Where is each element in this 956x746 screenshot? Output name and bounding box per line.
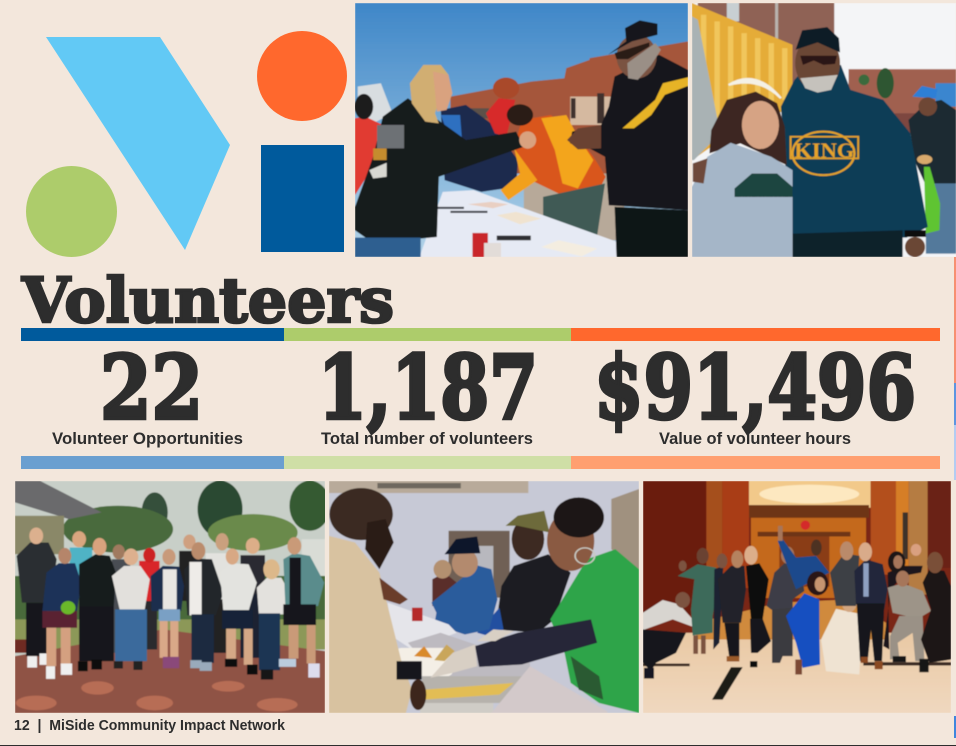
photo: two volunteers posing: EASTERN MARKET: [736, 189, 792, 199]
footer: page number and organisation: 12 | MiSide Community Impact Network: [14, 718, 286, 734]
photo: two volunteers posing: [692, 3, 956, 257]
dark suit and beard: [830, 553, 859, 606]
back row: [70, 548, 92, 598]
photo: volunteers at sign-in table: [355, 3, 688, 257]
photo: outdoor volunteer group: [15, 481, 325, 713]
dark coat pair: [713, 566, 723, 649]
logo: orange circle: [257, 31, 347, 121]
right edge colour strips: [954, 257, 956, 738]
black dress right: [921, 569, 951, 663]
grey suit crouching: [888, 583, 931, 616]
bottom edge line: [0, 745, 956, 746]
front row: [17, 527, 324, 680]
logo: blue chevron: [46, 37, 230, 250]
blue dress: [786, 593, 820, 668]
stat value: 22: 22: [100, 336, 203, 440]
stat: total volunteers: [318, 336, 538, 448]
stat label: total volunteers: Total number of volunteers: [321, 430, 533, 448]
white dress seated: [821, 609, 862, 675]
photo: volunteers serving food: [329, 481, 639, 713]
stat: value of hours: [594, 336, 916, 448]
top colour bar: [21, 328, 940, 341]
heading: Volunteers: Volunteers: [21, 264, 394, 337]
stat value: 1,187: 1,187: [318, 336, 538, 440]
blue suit raised arm: [778, 539, 829, 589]
green dress: [678, 564, 719, 635]
left crouching man: [643, 600, 694, 630]
stat label: opportunities: Volunteer Opportunities: [52, 430, 243, 448]
logo: green circle: [26, 166, 117, 257]
stat: volunteer opportunities: [52, 336, 243, 448]
photo: two volunteers posing: KING: [794, 139, 854, 162]
stat label: value of hours: Value of volunteer hours: [659, 430, 851, 448]
bottom colour bar: [21, 456, 940, 469]
arm raised woman: [883, 566, 923, 649]
logo graphic: [26, 31, 347, 257]
logo: blue square: [261, 145, 344, 252]
photo: indoor group pose: [643, 481, 951, 713]
suited man centre left: [767, 562, 804, 619]
